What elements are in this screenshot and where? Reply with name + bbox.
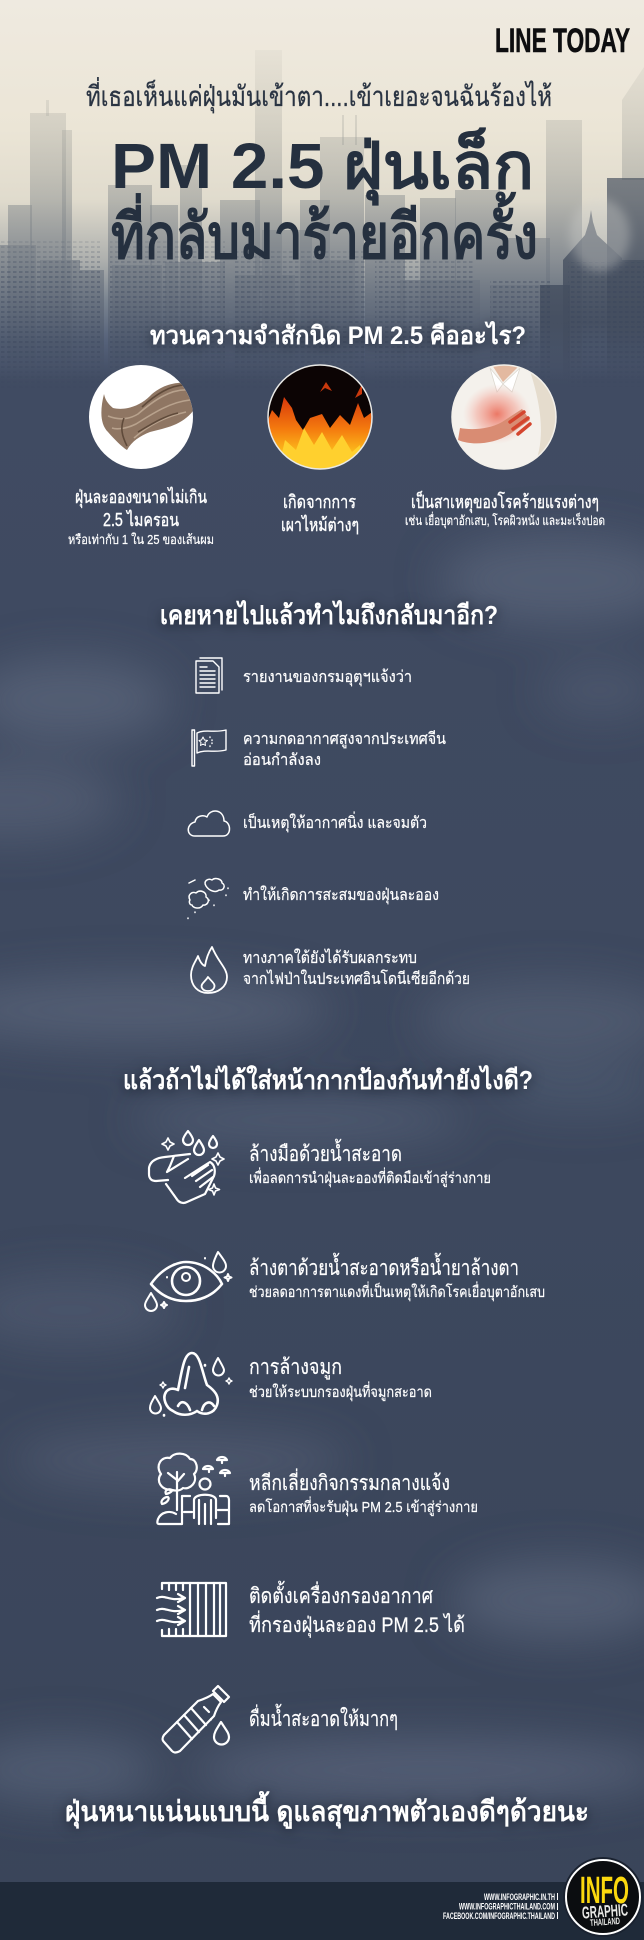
icon: water bottle [162, 1686, 229, 1752]
title block [86, 77, 552, 272]
text: wash hands: เพื่อลดการนำฝุ่นละอองที่ติดมือเข้าสู่ร่างกาย [249, 1167, 491, 1188]
caption: particle size [68, 486, 214, 547]
text: wash hands: ล้างมือด้วยน้ำสะอาด [249, 1139, 402, 1166]
heading: why it came back: เคยหายไปแล้วทำไมถึงกลับมาอีก? [160, 599, 498, 630]
main title line 2: ที่กลับมาร้ายอีกครั้ง [111, 191, 538, 272]
footer links: WWW.INFOGRAPHICTHAILAND.COM [459, 1902, 555, 1912]
image: man with chest pain [450, 365, 560, 470]
logo: Infographic Thailand badge [563, 1857, 643, 1937]
icon: document [196, 658, 222, 693]
text: wash eyes [249, 1253, 545, 1302]
icon: eye [145, 1252, 232, 1311]
text: high pressure [243, 730, 446, 769]
text: air purifier: ที่กรองฝุ่นละออง PM 2.5 ได้ [249, 1610, 465, 1638]
logo: Infographic Thailand badge: THAILAND [590, 1916, 620, 1929]
closing message: ฝุ่นหนาแน่นแบบนี้ ดูแลสุขภาพตัวเองดีๆด้วยนะ [65, 1790, 589, 1829]
text: wash nose [249, 1356, 432, 1402]
text: wash eyes: ช่วยลดอาการตาแดงที่เป็นเหตุให้เกิดโรคเยื่อบุตาอักเสบ [249, 1281, 545, 1302]
caption: particle size: 2.5 ไมครอน [103, 509, 179, 530]
text: report: รายงานของกรมอุตุฯแจ้งว่า [243, 668, 412, 687]
panel: three facts [68, 365, 605, 547]
text: avoid outdoor activity: ลดโอกาสที่จะรับฝุ่น PM 2.5 เข้าสู่ร่างกาย [249, 1496, 478, 1517]
main title line 1: PM 2.5 ฝุ่นเล็ก [111, 128, 534, 206]
footer links: FACEBOOK.COM/INFOGRAPHIC.THAILAND [443, 1911, 555, 1922]
clouds: soft fog across the navy body [0, 536, 644, 1804]
caption: diseases [405, 490, 605, 529]
panel: advice list [145, 1131, 545, 1752]
text: accumulation: ทำให้เกิดการสะสมของฝุ่นละออง [243, 885, 439, 905]
text: forest fires: จากไฟป่าในประเทศอินโดนีเซียอีกด้วย [243, 969, 470, 988]
text: wash nose: ช่วยให้ระบบกรองฝุ่นที่จมูกสะอาด [249, 1381, 432, 1402]
text: forest fires [243, 948, 470, 988]
text: avoid outdoor activity: หลีกเลี่ยงกิจกรรมกลางแจ้ง [249, 1468, 450, 1495]
text: air purifier [249, 1581, 465, 1638]
icon: China flag [192, 730, 226, 766]
heading: what is PM 2.5: ทวนความจำสักนิด PM 2.5 คืออะไร? [150, 320, 526, 350]
icon: air filter [157, 1583, 226, 1636]
text: drink water: ดื่มน้ำสะอาดให้มากๆ [249, 1704, 398, 1731]
text: high pressure: อ่อนกำลังลง [243, 752, 321, 769]
icon: dust clouds [188, 879, 228, 918]
text: wash eyes: ล้างตาด้วยน้ำสะอาดหรือน้ำยาล้างตา [249, 1253, 519, 1280]
caption: particle size: ฝุ่นละอองขนาดไม่เกิน [75, 486, 207, 508]
icon: washing hands [149, 1131, 224, 1203]
caption: combustion [281, 492, 359, 535]
heading: what to do without a mask: แล้วถ้าไม่ได้ใส่หน้ากากป้องกันทำยังไงดี? [123, 1064, 533, 1095]
text: high pressure: ความกดอากาศสูงจากประเทศจีน [243, 730, 446, 749]
image: hair strand [89, 365, 193, 469]
text: forest fires: ทางภาคใต้ยังได้รับผลกระทบ [243, 948, 417, 967]
text: wash nose: การล้างจมูก [249, 1356, 342, 1380]
caption: particle size: หรือเท่ากับ 1 ใน 25 ของเส้นผม [68, 532, 214, 547]
footer bar [0, 1882, 644, 1940]
icon: cloud [188, 811, 230, 836]
text: avoid outdoor activity [249, 1468, 478, 1517]
panel: reasons list [188, 658, 470, 993]
text: air purifier: ติดตั้งเครื่องกรองอากาศ [249, 1581, 434, 1608]
footer links [443, 1892, 558, 1922]
image: fire [266, 365, 375, 475]
skyline of hazy buildings [0, 50, 644, 390]
icon: person on park bench [157, 1454, 230, 1524]
caption: combustion: เกิดจากการ [283, 492, 356, 512]
icon: flame [191, 947, 227, 993]
text: still air: เป็นเหตุให้อากาศนิ่ง และจมตัว [243, 811, 427, 833]
text: wash hands [249, 1139, 491, 1188]
footer links: WWW.INFOGRAPHIC.IN.TH [484, 1892, 555, 1903]
icon: nose [150, 1353, 232, 1416]
caption: combustion: เผาไหม้ต่างๆ [281, 514, 359, 535]
